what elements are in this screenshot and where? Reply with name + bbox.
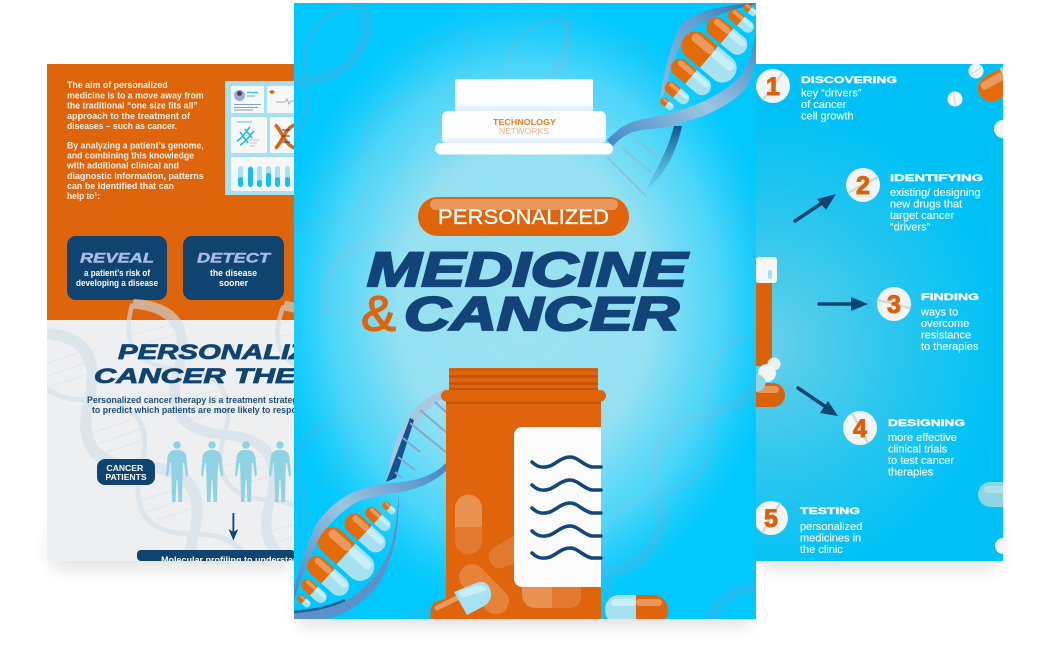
intro paragraph one: The aim of personalized: [67, 80, 168, 90]
step 1: discovering: 1: [766, 73, 780, 101]
step 3: finding: FINDING: [921, 292, 979, 303]
intro paragraph one: the traditional “one size fits all”: [67, 100, 198, 110]
intro paragraph two: By analyzing a patient’s genome,: [67, 140, 204, 150]
step 5: testing: [756, 501, 862, 553]
step 4: designing: 4: [853, 415, 867, 443]
dashboard illustration: [225, 81, 297, 195]
title: medicine and cancer: MEDICINE: [367, 243, 689, 297]
label: cancer patients: PATIENTS: [105, 472, 147, 482]
step 3: finding: ways to: [920, 306, 958, 318]
box: detect: the disease: [210, 268, 257, 278]
label: cancer patients: [97, 459, 155, 485]
intro paragraph two: with additional clinical and: [66, 161, 179, 171]
step 4: designing: DESIGNING: [888, 418, 965, 429]
step 5: testing: 5: [764, 505, 778, 533]
step 4: designing: to test cancer: [888, 455, 954, 467]
step 1: discovering: DISCOVERING: [801, 75, 897, 86]
arrow to step 4: [798, 388, 838, 416]
logo plate: TECHNOLOGY: [493, 117, 556, 127]
step 2: identifying: 2: [856, 172, 870, 200]
therapy heading: [94, 344, 294, 384]
logo plate: [435, 79, 613, 154]
step 2: identifying: IDENTIFYING: [890, 173, 983, 184]
step 3: finding: resistance: [921, 330, 971, 342]
intro paragraph two: help to¹:: [67, 191, 100, 201]
therapy description: to predict which patients are more likely to respond: [92, 405, 308, 415]
step 4: designing: more effective: [888, 432, 957, 444]
step 2: identifying: new drugs that: [890, 198, 962, 210]
step 3: finding: [877, 287, 979, 353]
decorative pills: [948, 64, 1003, 554]
intro paragraph two: and combining this knowledge: [67, 150, 194, 160]
step 1: discovering: of cancer: [801, 99, 847, 111]
step 4: designing: [843, 411, 965, 478]
box: reveal: [67, 236, 167, 300]
label: cancer patients: CANCER: [106, 463, 144, 473]
step 3: finding: 3: [887, 291, 901, 319]
therapy heading: CANCER THERAPY: [94, 365, 384, 388]
step 2: identifying: existing/ designing: [890, 187, 981, 199]
background dna strands: [294, 3, 756, 619]
soft drop shadows: [52, 530, 998, 626]
pill bottle: [441, 368, 606, 619]
central glow: [294, 3, 756, 619]
panel: left page, personalized therapy: [47, 64, 294, 561]
intro paragraph one: diseases – such as cancer.: [67, 121, 177, 131]
bottle edge and spilled pills: [756, 257, 785, 407]
box: detect: sooner: [219, 278, 248, 288]
box: molecular profiling: [137, 550, 294, 561]
therapy heading: PERSONALIZED: [118, 341, 348, 364]
box: reveal: a patient’s risk of: [84, 268, 151, 278]
patient figures: [166, 441, 291, 502]
panel: centre cover page: [294, 3, 756, 619]
step 2: identifying: [846, 168, 984, 234]
dna illustration: top right: [607, 2, 758, 197]
title pill: personalized: PERSONALIZED: [438, 206, 609, 229]
title pill: personalized: [418, 197, 629, 236]
step 2: identifying: “drivers”: [890, 222, 931, 234]
step 4: designing: clinical trials: [888, 444, 948, 456]
intro paragraph one: medicine is to a move away from: [67, 90, 204, 100]
spilled capsule on bottle: [430, 582, 491, 619]
step 5: testing: the clinic: [800, 544, 843, 556]
intro paragraph one: [67, 80, 204, 131]
title: medicine and cancer: &: [361, 286, 396, 342]
panel: right page, steps: [756, 64, 1003, 561]
grey therapy section: [47, 320, 295, 561]
step 5: testing: personalized: [800, 521, 862, 533]
step 4: designing: therapies: [888, 466, 934, 478]
spilled capsule on right: [605, 595, 668, 619]
intro paragraph two: can be identified that can: [67, 181, 174, 191]
step 1: discovering: [756, 69, 897, 122]
box: reveal: developing a disease: [76, 278, 158, 288]
intro paragraph one: approach to the treatment of: [67, 111, 191, 121]
step 5: testing: TESTING: [800, 506, 860, 517]
box: detect: DETECT: [197, 250, 272, 266]
translucent pills inside bottle: [454, 495, 581, 619]
orange intro section: [47, 64, 295, 320]
step 1: discovering: key “drivers”: [801, 88, 862, 100]
intro paragraph two: diagnostic information, patterns: [67, 171, 204, 181]
arrow to step 2: [795, 194, 836, 221]
step 2: identifying: target cancer: [890, 210, 955, 222]
intro paragraph two: [66, 140, 204, 201]
arrow to step 3: [819, 297, 868, 311]
box: reveal: REVEAL: [80, 250, 154, 266]
title: medicine and cancer: [362, 251, 690, 332]
step 3: finding: overcome: [921, 318, 969, 330]
step 5: testing: medicines in: [800, 532, 861, 544]
therapy description: Personalized cancer therapy is a treatment strategy that aims: [87, 395, 344, 405]
arrow: down: [228, 513, 238, 540]
background dna strands: [47, 298, 294, 561]
title: medicine and cancer: CANCER: [404, 288, 679, 341]
dna illustration: bottom left: [294, 388, 447, 619]
box: molecular profiling: Molecular profiling to understand: [161, 555, 304, 565]
bottle label: [514, 427, 601, 587]
step 1: discovering: cell growth: [801, 110, 854, 122]
logo plate: NETWORKS: [499, 126, 549, 136]
box: detect: [183, 236, 284, 300]
label text lines: [532, 457, 601, 558]
step 3: finding: to therapies: [921, 341, 979, 353]
